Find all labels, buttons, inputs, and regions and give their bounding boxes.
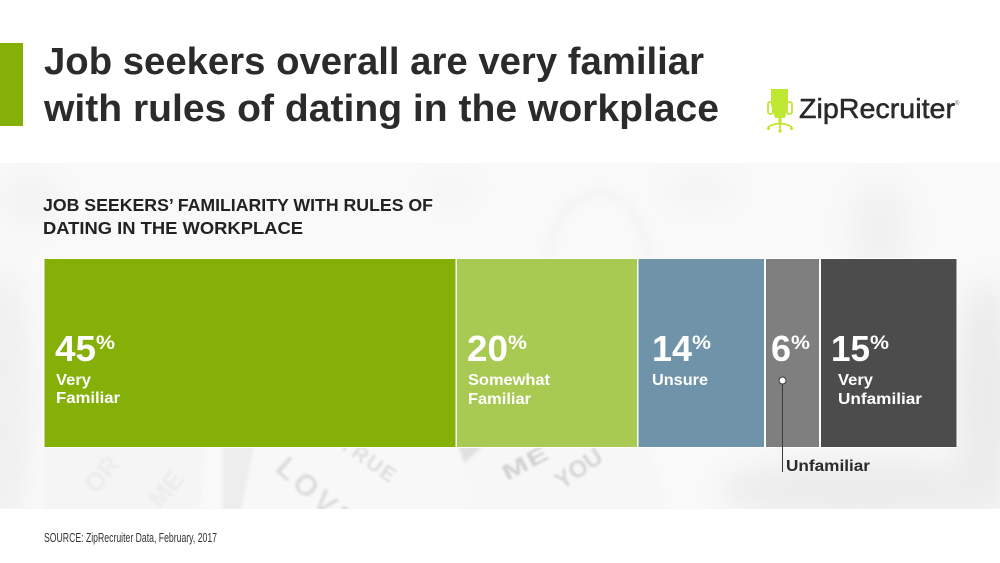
segment: very familiar 45%: Very (56, 372, 91, 389)
segment: very familiar 45% (44, 259, 456, 447)
embossed words: ME (142, 465, 190, 514)
logo: ZipRecruiter: ® (955, 100, 960, 107)
segment: very unfamiliar 15%: Very (838, 372, 873, 389)
callout: unfamiliar leader line: Unfamiliar (786, 458, 870, 475)
chart heading (43, 195, 433, 238)
heart shapes (223, 448, 482, 509)
segment: very familiar 45%: Familiar (56, 390, 120, 407)
segment: very unfamiliar 15%: % (870, 333, 889, 354)
accent bar (0, 43, 23, 126)
segment: very unfamiliar 15%: Unfamiliar (838, 391, 922, 408)
segment: somewhat familiar 20%: % (508, 333, 527, 354)
chart heading: DATING IN THE WORKPLACE (43, 218, 303, 238)
segment: unsure 14%: % (692, 333, 711, 354)
segment: unfamiliar 6%: 6 (771, 328, 791, 369)
embossed words: ME (498, 440, 553, 485)
source note: SOURCE: ZipRecruiter Data, February, 2017 (44, 531, 217, 545)
segment: very familiar 45%: 45 (55, 328, 96, 369)
segment: somewhat familiar 20%: 20 (467, 328, 508, 369)
title (43, 41, 719, 130)
segment: very unfamiliar 15%: 15 (831, 328, 870, 369)
title: with rules of dating in the workplace (43, 88, 719, 130)
title: Job seekers overall are very familiar (44, 41, 704, 83)
logo: ZipRecruiter (767, 89, 960, 133)
chart heading: JOB SEEKERS’ FAMILIARITY WITH RULES OF (43, 195, 433, 215)
icon: office chair (767, 89, 793, 133)
embossed words: LOVE (269, 451, 364, 541)
segment: somewhat familiar 20%: Somewhat (468, 372, 551, 389)
callout: unfamiliar leader line (779, 377, 870, 475)
background photo panel (0, 163, 1000, 541)
segment: unsure 14%: 14 (652, 328, 692, 369)
segment: very familiar 45%: % (96, 333, 115, 354)
segment: unsure 14%: Unsure (652, 372, 708, 389)
embossed words (92, 448, 602, 509)
segment: unfamiliar 6%: % (791, 333, 810, 354)
embossed words: YOU (550, 443, 608, 495)
segment: very unfamiliar 15% (821, 259, 956, 447)
embossed words: TRUE (335, 432, 402, 488)
embossed words: OR (78, 450, 126, 499)
wordmark: ZipRecruiter (799, 93, 955, 124)
segment: unsure 14% (638, 259, 764, 447)
segment: unfamiliar 6% (766, 259, 819, 447)
segment: somewhat familiar 20% (457, 259, 637, 447)
stacked bar chart (44, 258, 958, 448)
segment: somewhat familiar 20%: Familiar (468, 391, 531, 408)
